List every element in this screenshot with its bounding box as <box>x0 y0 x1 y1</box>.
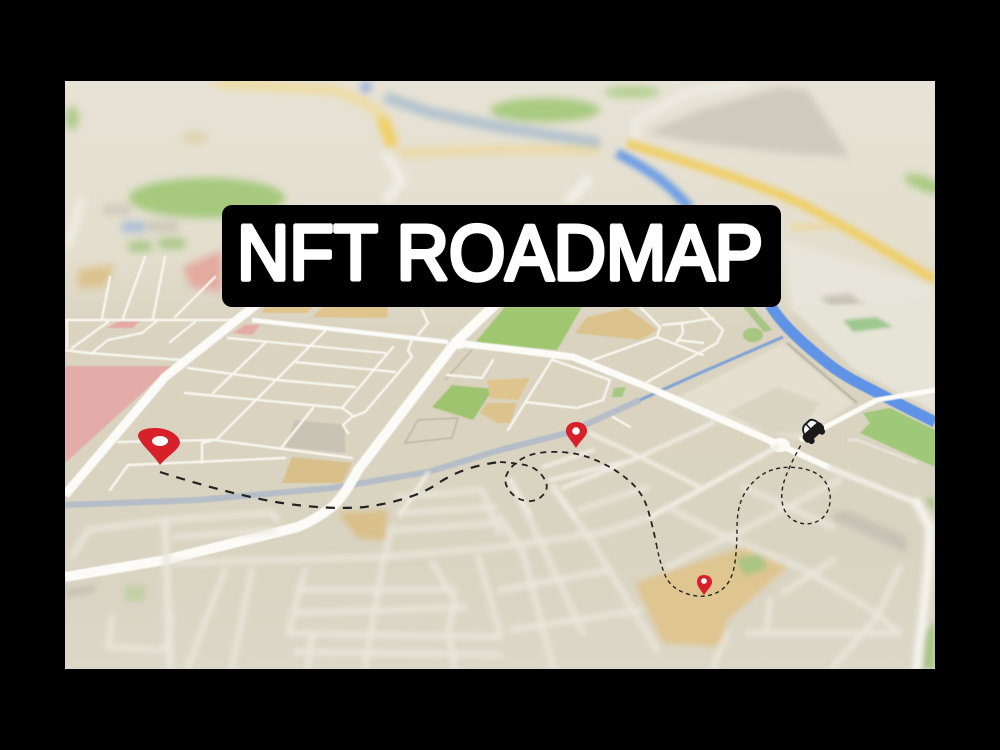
map: distant blurred features <box>65 81 935 308</box>
map panel <box>65 81 948 669</box>
map: foreground blurred streets <box>65 480 935 669</box>
route: valley and last loop to the car <box>656 443 830 596</box>
route: first loop and curve past the middle pin <box>500 452 656 545</box>
icon: lower location pin <box>697 575 712 595</box>
icon: large location pin <box>138 428 180 465</box>
map: mid-ground thin streets <box>65 257 723 490</box>
map: yellow highway and blue canal top <box>617 143 935 315</box>
map: grey-blue river <box>65 400 640 505</box>
icon: car <box>802 418 826 444</box>
map: blue river <box>770 305 935 422</box>
route: dashed path start <box>160 462 500 508</box>
map: light land blocks <box>673 300 935 440</box>
map: crossing main roads <box>65 300 935 577</box>
icon: middle location pin <box>566 422 587 448</box>
map: blue canal thin <box>640 337 783 400</box>
map: parks and blocks <box>65 307 935 483</box>
map: street transition band <box>400 423 917 518</box>
title: NFT ROADMAP <box>237 208 763 296</box>
